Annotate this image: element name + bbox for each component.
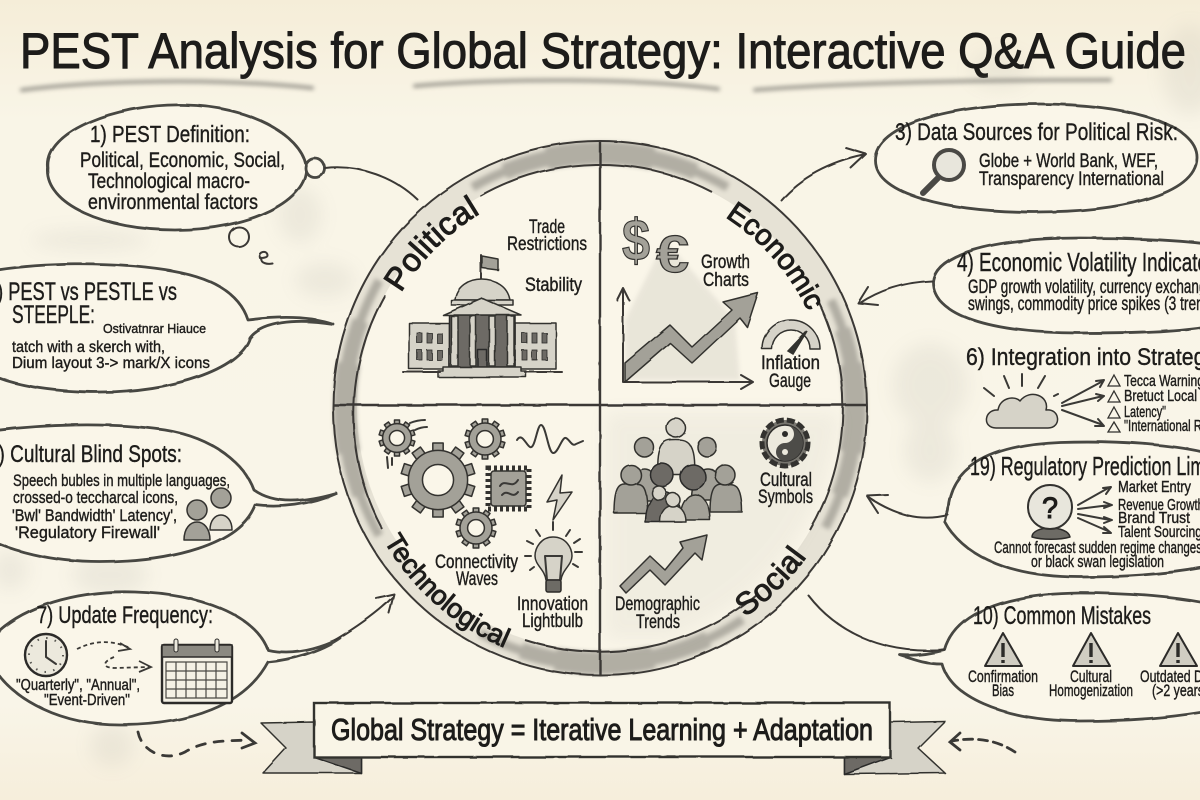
icon: yin-yang cultural symbol [762,420,808,466]
bubble outline [933,238,1200,333]
bubble outline [48,105,306,230]
heading: STEEPLE: [12,301,95,329]
icon: demographic trend arrow [620,535,707,593]
label: demographic trends: Demographic [615,594,700,615]
heading: 7) Update Frequency: [37,602,213,629]
icon: lightbulb [525,522,582,592]
panel: question 4 economic volatility [858,238,1200,333]
icon: crystal ball [1028,485,1072,539]
panel: question 9 regulatory prediction limits [867,442,1200,577]
line chart with growth arrow [617,288,758,389]
panel: question 2 PEST vs PESTLE vs STEEPLE [0,264,333,392]
body text: Globe + World Bank, WEF, [979,151,1158,172]
heading: 1) PEST Definition: [90,121,250,147]
bubble outline [0,592,340,725]
body text: crossed-o teccharcal icons, [13,488,178,507]
label: connectivity waves: Waves [456,569,498,590]
icon: crowd of people [614,418,742,522]
label: stability: Stability [525,275,582,296]
panel: question 5 cultural blind spots [0,425,336,562]
label: trade restrictions: Trade [529,217,565,238]
body text: 'Bwl' Bandwidth' Latency', [12,506,177,525]
body text: Political, Economic, Social, [80,149,285,172]
political quadrant content [403,217,587,377]
technological quadrant content [379,419,588,632]
arrows to impact list [1078,487,1112,533]
icon: cloud with incoming rays [984,374,1058,428]
chart shading [625,240,740,380]
bubble outline [945,442,1200,577]
connector arrow [858,281,932,305]
quadrant shading [605,412,840,640]
icon: microchip [488,468,529,509]
label: cultural symbols: Symbols [758,487,813,508]
dashed arrow: left to banner [138,732,255,756]
icon: two people talking [184,488,232,540]
icon: lightning bolt [547,475,572,520]
label: connectivity waves: Connectivity [435,552,518,573]
body text: 'Regulatory Firewall' [15,523,160,542]
bubble outline [0,425,336,562]
body text: tatch with a skerch with, [12,339,165,356]
ribbon tails [261,703,945,774]
label: demographic trends: Trends [636,612,680,633]
dashed cycle arrows [77,642,151,672]
ring base [345,153,855,663]
quadrant label: Economic: Economic [726,201,820,310]
icon: gears [379,419,505,548]
ring outlines [333,141,867,675]
icon: crystal ball: ? [1042,492,1058,525]
icon: magnifying glass [923,150,964,193]
label: trade restrictions: Restrictions [507,234,587,255]
quadrant dividers [333,141,867,675]
icon: inflation gauge [762,320,820,354]
mistake labels: Bias [992,681,1014,700]
mistake labels: Cultural [1070,667,1112,686]
body text: Technological macro- [88,170,250,193]
body text: Speech bubles in multiple languages, [13,471,230,490]
banner: global strategy equation [261,703,945,774]
label: inflation gauge: Gauge [769,371,811,392]
quadrant label: Political: Political [383,194,480,292]
ring shading [345,153,855,663]
arrow: technological to update frequency [335,594,394,640]
bubble outline [875,104,1197,212]
PEST wheel [333,141,867,675]
bubble outline [900,593,1200,721]
icon: dollar sign: $ [622,208,650,273]
panel: question 3 data sources [875,104,1197,212]
label: innovation lightbulb: Innovation [517,594,588,615]
arrows to warnings [1062,380,1104,426]
panel: question 1 PEST definition [48,105,418,264]
icon: government building [403,255,562,377]
warning list: Latency" [1124,404,1166,421]
label: growth charts: Charts [703,270,749,291]
panel: question 7 update frequency [0,592,340,725]
mistake labels: Homogenization [1049,681,1133,700]
quadrant label: Technological: Technological [386,531,512,648]
body text: "Quarterly", "Annual", [16,677,140,694]
icon: calendar [162,639,232,703]
economic quadrant content [617,208,820,392]
banner text: Global Strategy = Iterative Learning + Adaptation [331,712,873,747]
arrow: economic to data sources [781,148,866,200]
icon: euro sign: € [656,226,689,284]
mistake labels: Confirmation [968,667,1038,686]
title underline strokes [22,80,1110,90]
body text: "Event-Driven" [44,692,130,709]
impact list: Brand Trust [1118,510,1190,527]
warning list [1108,373,1200,435]
icon: warning triangles [985,633,1197,666]
connector to wheel [229,158,418,264]
dashed arrow: right to banner [950,733,1015,752]
label: inflation gauge: Inflation [761,353,820,374]
body text: Dium layout 3-> mark/X icons [12,355,210,372]
body text: environmental factors [88,191,258,214]
label: innovation lightbulb: Lightbulb [522,611,583,632]
body text: Transparency International [979,169,1164,190]
social quadrant content [605,412,840,640]
label: growth charts: Growth [701,252,750,273]
icon: clock [25,634,67,676]
bubble outline [0,264,333,392]
label: cultural symbols: Cultural [760,470,812,491]
panel: question 6 integration into strategy [966,344,1200,435]
quadrant label: Social: Social [736,544,806,614]
connector line [808,595,945,651]
panel: question 10 common mistakes [808,593,1200,721]
connector arrow [867,495,948,518]
body text: Ostivatnrar Hiauce [103,321,206,336]
icon: connectivity wave [517,425,583,453]
